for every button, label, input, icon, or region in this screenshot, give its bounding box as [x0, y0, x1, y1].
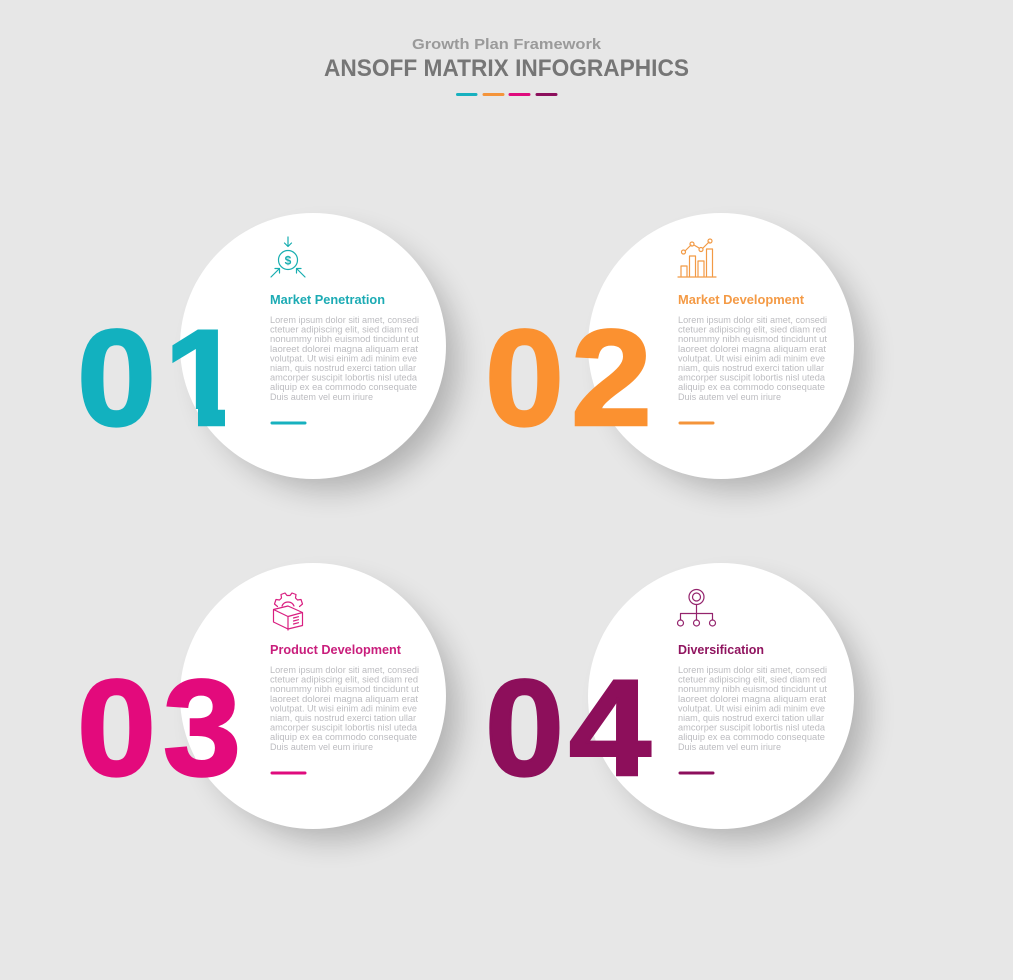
white circle: [180, 563, 446, 829]
circle shadow: [202, 584, 458, 840]
white circle: [180, 213, 446, 479]
body text: laoreet dolorei magna aliquam erat: [270, 694, 419, 704]
number 01: 0: [77, 302, 156, 455]
body text: amcorper suscipit lobortis nisl uteda: [678, 373, 825, 383]
number 03: 3: [163, 652, 241, 805]
colour legend dashes: [458, 93, 556, 96]
number 02: [485, 302, 652, 455]
icon: dollar with inward arrows: $: [285, 254, 292, 268]
body text: aliquip ex ea commodo consequate: [270, 382, 417, 392]
body text: aliquip ex ea commodo consequate: [678, 732, 825, 742]
white circle: [588, 563, 854, 829]
body text: Lorem ipsum dolor siti amet, consedi: [678, 315, 827, 325]
body text: ctetuer adipiscing elit, sied diam red: [270, 675, 418, 685]
body text: volutpat. Ut wisi einim adi minim eve: [270, 703, 417, 713]
body text: Duis autem vel eum iriure: [270, 392, 373, 402]
body text: laoreet dolorei magna aliquam erat: [270, 344, 419, 354]
body text: laoreet dolorei magna aliquam erat: [678, 694, 827, 704]
number 04: [485, 652, 651, 805]
body text: Lorem ipsum dolor siti amet, consedi: [678, 665, 827, 675]
accent dash: [680, 772, 713, 774]
body text: niam, quis nostrud exerci tation ullar: [270, 363, 416, 373]
body text: nonummy nibh euismod tincidunt ut: [270, 684, 420, 694]
body text: ctetuer adipiscing elit, sied diam red: [678, 325, 826, 335]
icon: bar chart with trend line: [678, 239, 716, 277]
body text: niam, quis nostrud exerci tation ullar: [678, 713, 824, 723]
number 04: 0: [485, 652, 564, 805]
body text: laoreet dolorei magna aliquam erat: [678, 344, 827, 354]
accent dash: [272, 772, 305, 774]
panel: market penetration: [77, 213, 458, 490]
body text: ctetuer adipiscing elit, sied diam red: [270, 325, 418, 335]
heading: Market Penetration: [270, 293, 385, 307]
subtitle: Growth Plan Framework: [412, 36, 602, 53]
body text: volutpat. Ut wisi einim adi minim eve: [270, 353, 417, 363]
body text: aliquip ex ea commodo consequate: [678, 382, 825, 392]
body text: [270, 665, 420, 752]
number 01: 1: [164, 302, 243, 455]
icon: dollar with inward arrows: [271, 237, 305, 277]
panel: diversification: [485, 563, 866, 840]
body text: Lorem ipsum dolor siti amet, consedi: [270, 665, 419, 675]
body text: [270, 315, 420, 402]
white circle: [588, 213, 854, 479]
body text: amcorper suscipit lobortis nisl uteda: [270, 723, 417, 733]
body text: nonummy nibh euismod tincidunt ut: [270, 334, 420, 344]
circle shadow: [610, 584, 866, 840]
accent dash: [272, 422, 305, 424]
heading: Product Development: [270, 643, 402, 657]
body text: nonummy nibh euismod tincidunt ut: [678, 334, 828, 344]
body text: ctetuer adipiscing elit, sied diam red: [678, 675, 826, 685]
icon: hierarchy: [678, 590, 716, 626]
number 02: 2: [571, 302, 652, 455]
number 01: [81, 328, 225, 428]
body text: Duis autem vel eum iriure: [678, 742, 781, 752]
circle shadow: [202, 234, 458, 490]
heading: Market Development: [678, 293, 805, 307]
body text: nonummy nibh euismod tincidunt ut: [678, 684, 828, 694]
title: ANSOFF MATRIX INFOGRAPHICS: [324, 55, 689, 82]
circle shadow: [610, 234, 866, 490]
number 03: 0: [77, 652, 156, 805]
body text: [678, 315, 828, 402]
number 04: 4: [569, 652, 651, 805]
header: [324, 36, 689, 94]
body text: volutpat. Ut wisi einim adi minim eve: [678, 703, 825, 713]
number 03: [77, 652, 241, 805]
number 02: 0: [485, 302, 564, 455]
body text: amcorper suscipit lobortis nisl uteda: [270, 373, 417, 383]
panel: product development: [77, 563, 458, 840]
body text: aliquip ex ea commodo consequate: [270, 732, 417, 742]
icon: gear and box: [274, 593, 302, 630]
heading: Diversification: [678, 643, 764, 657]
body text: Lorem ipsum dolor siti amet, consedi: [270, 315, 419, 325]
body text: niam, quis nostrud exerci tation ullar: [678, 363, 824, 373]
body text: Duis autem vel eum iriure: [678, 392, 781, 402]
body text: [678, 665, 828, 752]
accent dash: [680, 422, 713, 424]
panel: market development: [485, 213, 866, 490]
body text: Duis autem vel eum iriure: [270, 742, 373, 752]
body text: amcorper suscipit lobortis nisl uteda: [678, 723, 825, 733]
body text: niam, quis nostrud exerci tation ullar: [270, 713, 416, 723]
body text: volutpat. Ut wisi einim adi minim eve: [678, 353, 825, 363]
